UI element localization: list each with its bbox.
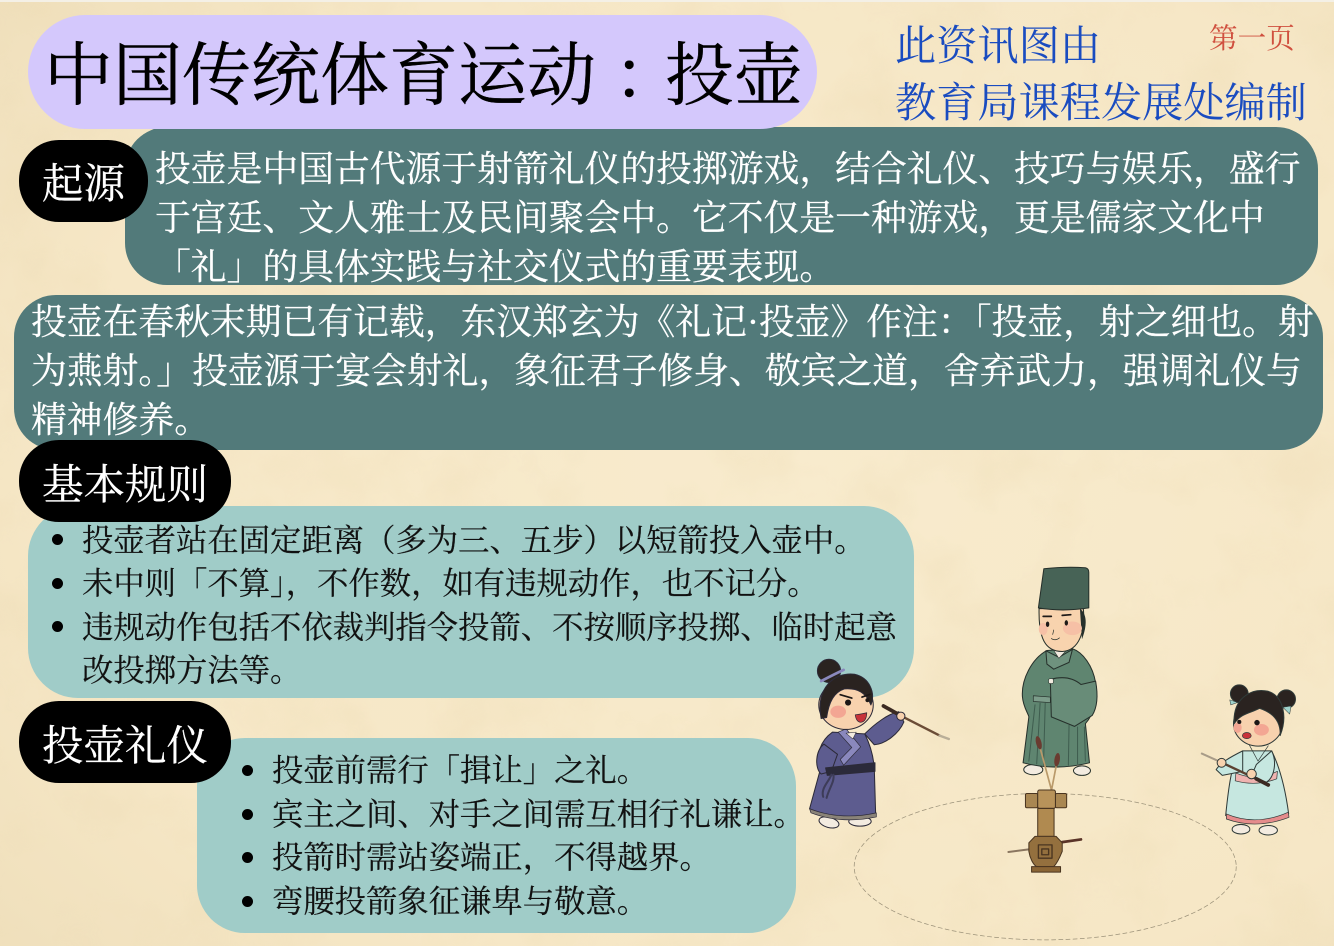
bullet 3 (52, 621, 63, 632)
bullet 3 (242, 852, 253, 863)
text: etiquette 1: 投壶前需行「揖让」之礼。 (272, 753, 648, 788)
dashed throwing circle (854, 793, 1236, 940)
text: rule 3 continued: 改投掷方法等。 (82, 653, 301, 688)
figure: official in green (1022, 567, 1097, 775)
credit text: 教育局课程发展处编制 (895, 80, 1307, 126)
heading: etiquette (19, 701, 231, 783)
heading: basic rules: 基本规则 (42, 462, 208, 508)
panel: history text (14, 295, 1323, 450)
bullet 1 (242, 765, 253, 776)
bullet 2 (52, 578, 63, 589)
text: origin line 2: 于宫廷、文人雅士及民间聚会中。它不仅是一种游戏，更是儒家文化中 (155, 198, 1265, 238)
text: etiquette 2: 宾主之间、对手之间需互相行礼谦让。 (272, 797, 805, 832)
pitch pot (1008, 790, 1081, 872)
text: history line 2: 为燕射。」投壶源于宴会射礼，象征君子修身、敬宾之道，舍弃武力，强调礼仪与 (31, 351, 1302, 391)
page number: 第一页 (1209, 24, 1295, 55)
heading: etiquette: 投壶礼仪 (42, 723, 208, 769)
panel: basic rules (28, 506, 914, 698)
text: etiquette 3: 投箭时需站姿端正，不得越界。 (272, 840, 711, 875)
heading: basic rules (19, 440, 231, 522)
figure: girl in teal (1202, 685, 1295, 835)
bullet 1 (52, 534, 63, 545)
text: rule 3: 违规动作包括不依裁判指令投箭、不按顺序投掷、临时起意 (82, 610, 897, 645)
illustration: pitch-pot scene (809, 566, 1296, 940)
text: history line 1: 投壶在春秋末期已有记载，东汉郑玄为《礼记·投壶》作注：「投壶，射之细也。射 (31, 302, 1314, 342)
text: etiquette 4: 弯腰投箭象征谦卑与敬意。 (272, 884, 648, 919)
title (28, 15, 817, 129)
title: 中国传统体育运动 投壶 (44, 38, 803, 114)
title: ： (613, 38, 682, 114)
panel: etiquette (197, 738, 796, 933)
figure: boy in purple (810, 659, 949, 830)
text: origin line 3: 「礼」的具体实践与社交仪式的重要表现。 (155, 247, 835, 287)
heading: origin: 起源 (42, 161, 125, 207)
credit text (895, 23, 1307, 126)
text: rule 2: 未中则「不算」，不作数，如有违规动作，也不记分。 (82, 566, 819, 601)
text: history line 3: 精神修养。 (31, 400, 210, 440)
text: rule 1: 投壶者站在固定距离（多为三、五步）以短箭投入壶中。 (82, 523, 866, 558)
heading: origin (19, 140, 148, 222)
credit text: 此资讯图由 (895, 23, 1101, 69)
bullet 2 (242, 809, 253, 820)
text: origin line 1: 投壶是中国古代源于射箭礼仪的投掷游戏，结合礼仪、技巧与娱乐，盛行 (155, 149, 1300, 189)
bullet 4 (242, 896, 253, 907)
panel: origin text (125, 127, 1318, 285)
arrows in pot (1034, 735, 1061, 794)
